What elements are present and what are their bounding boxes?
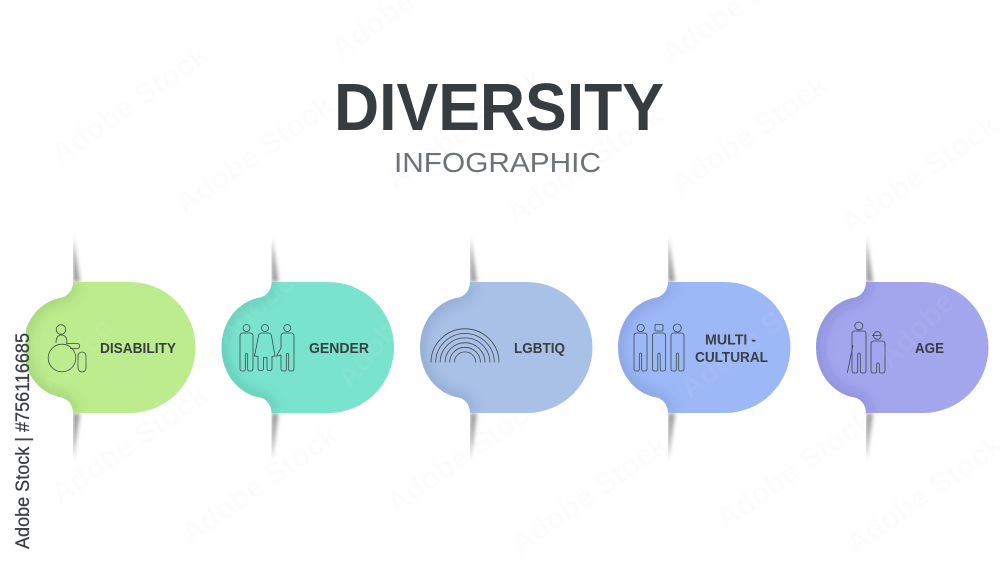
background watermark: Adobe Stock: [835, 108, 1000, 241]
panel: gender: [222, 237, 394, 460]
background watermark: Adobe Stock: [500, 98, 669, 231]
icon: three gender figures: [240, 324, 294, 371]
panel: age: [816, 237, 988, 460]
label: disability: DISABILITY: [100, 340, 176, 357]
background watermark: Adobe Stock: [710, 403, 879, 536]
background watermark: Adobe Stock: [380, 388, 549, 521]
background watermark: Adobe Stock: [380, 63, 549, 196]
foreground watermark: Adobe: [208, 265, 301, 350]
label: age: AGE: [915, 340, 944, 357]
background watermark: Adobe Stock: [45, 38, 214, 171]
background watermark: Adobe Stock: [175, 418, 344, 551]
panel: disability: [23, 237, 196, 460]
background watermark: Adobe Stock: [505, 428, 674, 561]
panel: lgbtiq: [420, 237, 592, 460]
foreground watermark: Adobe Stock: [674, 266, 839, 406]
icon: three diverse figures: [634, 324, 684, 371]
background watermark: Adobe Stock: [170, 88, 339, 221]
icon: rainbow: [431, 329, 499, 362]
label: multi-cultural: CULTURAL: [695, 349, 768, 366]
foreground watermark: Adobe: [330, 302, 415, 394]
label: lgbtiq: LGBTIQ: [514, 340, 565, 357]
icon: wheelchair user: [48, 325, 86, 372]
foreground watermark: [35, 222, 1000, 406]
foreground watermark: Adobe: [35, 312, 120, 404]
label: multi-cultural: MULTI -: [705, 332, 756, 348]
title: DIVERSITY: [334, 70, 664, 145]
label: multi-cultural: [695, 332, 768, 366]
background watermark: Adobe Stock: [45, 378, 214, 511]
panel: multi-cultural: [618, 237, 790, 460]
label: gender: GENDER: [309, 340, 369, 357]
subtitle: INFOGRAPHIC: [394, 147, 601, 178]
background watermark: Adobe Stock: [665, 68, 834, 201]
stock credit: Adobe Stock | #756116685: [13, 333, 34, 549]
icon: elder and child: [847, 322, 885, 373]
